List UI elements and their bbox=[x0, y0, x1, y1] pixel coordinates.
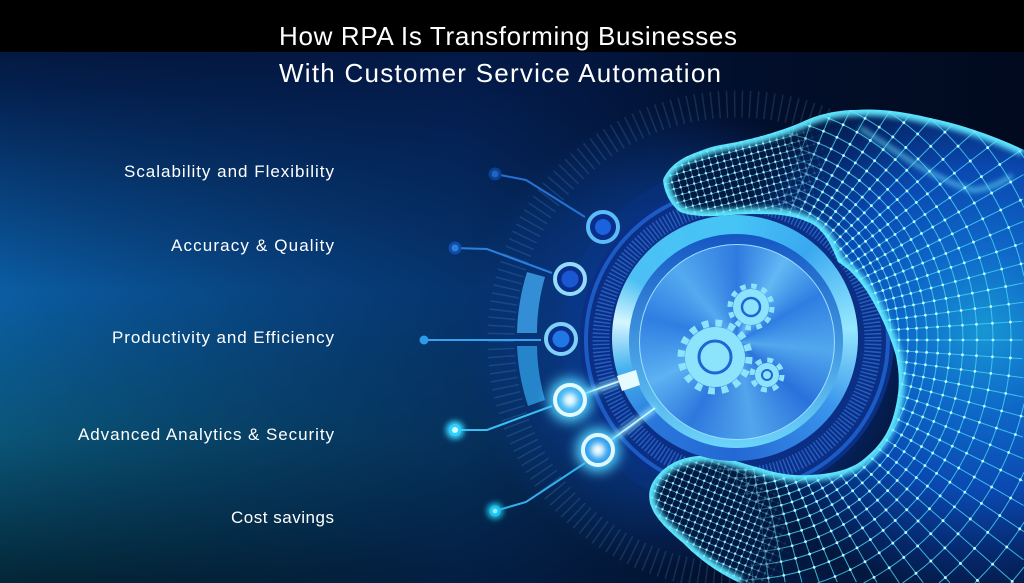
dial base with toothed ring bbox=[580, 183, 894, 497]
control nodes bbox=[546, 212, 620, 472]
title bbox=[279, 21, 737, 88]
knob inner bevel bbox=[629, 234, 843, 448]
icon: medium gear bbox=[730, 286, 772, 328]
wireframe hand bbox=[649, 110, 1024, 583]
concentric mesh lines bbox=[690, 110, 1024, 583]
knob metal ring bbox=[612, 215, 858, 461]
knob face bbox=[639, 244, 835, 440]
endpoint dots bbox=[420, 168, 503, 519]
node 5 glowing bbox=[576, 428, 620, 472]
title: With Customer Service Automation bbox=[279, 58, 721, 88]
light beams from glowing nodes to knob bbox=[572, 370, 655, 448]
label: productivity: Productivity and Efficiency bbox=[112, 328, 334, 347]
palm mesh bbox=[683, 110, 1024, 583]
icon: small gear bbox=[752, 360, 782, 390]
connector lines bbox=[424, 174, 585, 511]
mesh node dots bbox=[683, 110, 1022, 583]
top black title bar bbox=[0, 0, 1024, 52]
finger dense mesh bbox=[649, 128, 826, 583]
icon: gears bbox=[681, 286, 782, 391]
icon: large gear bbox=[681, 323, 749, 391]
knob bbox=[612, 215, 858, 461]
dial background rings bbox=[501, 104, 973, 576]
label: cost: Cost savings bbox=[231, 508, 334, 527]
node 1 bbox=[588, 212, 618, 242]
hand glowing rim bbox=[649, 109, 1024, 583]
node 4 glowing bbox=[548, 378, 592, 422]
label: analytics: Advanced Analytics & Security bbox=[78, 425, 334, 444]
radial mesh lines bbox=[685, 110, 1024, 583]
title: How RPA Is Transforming Businesses bbox=[279, 21, 737, 51]
palm crease bbox=[860, 128, 1012, 190]
node 3 bbox=[546, 324, 576, 354]
label: accuracy: Accuracy & Quality bbox=[171, 236, 334, 255]
labels bbox=[78, 162, 334, 527]
label: scalability: Scalability and Flexibility bbox=[124, 162, 334, 181]
node 2 bbox=[555, 264, 585, 294]
